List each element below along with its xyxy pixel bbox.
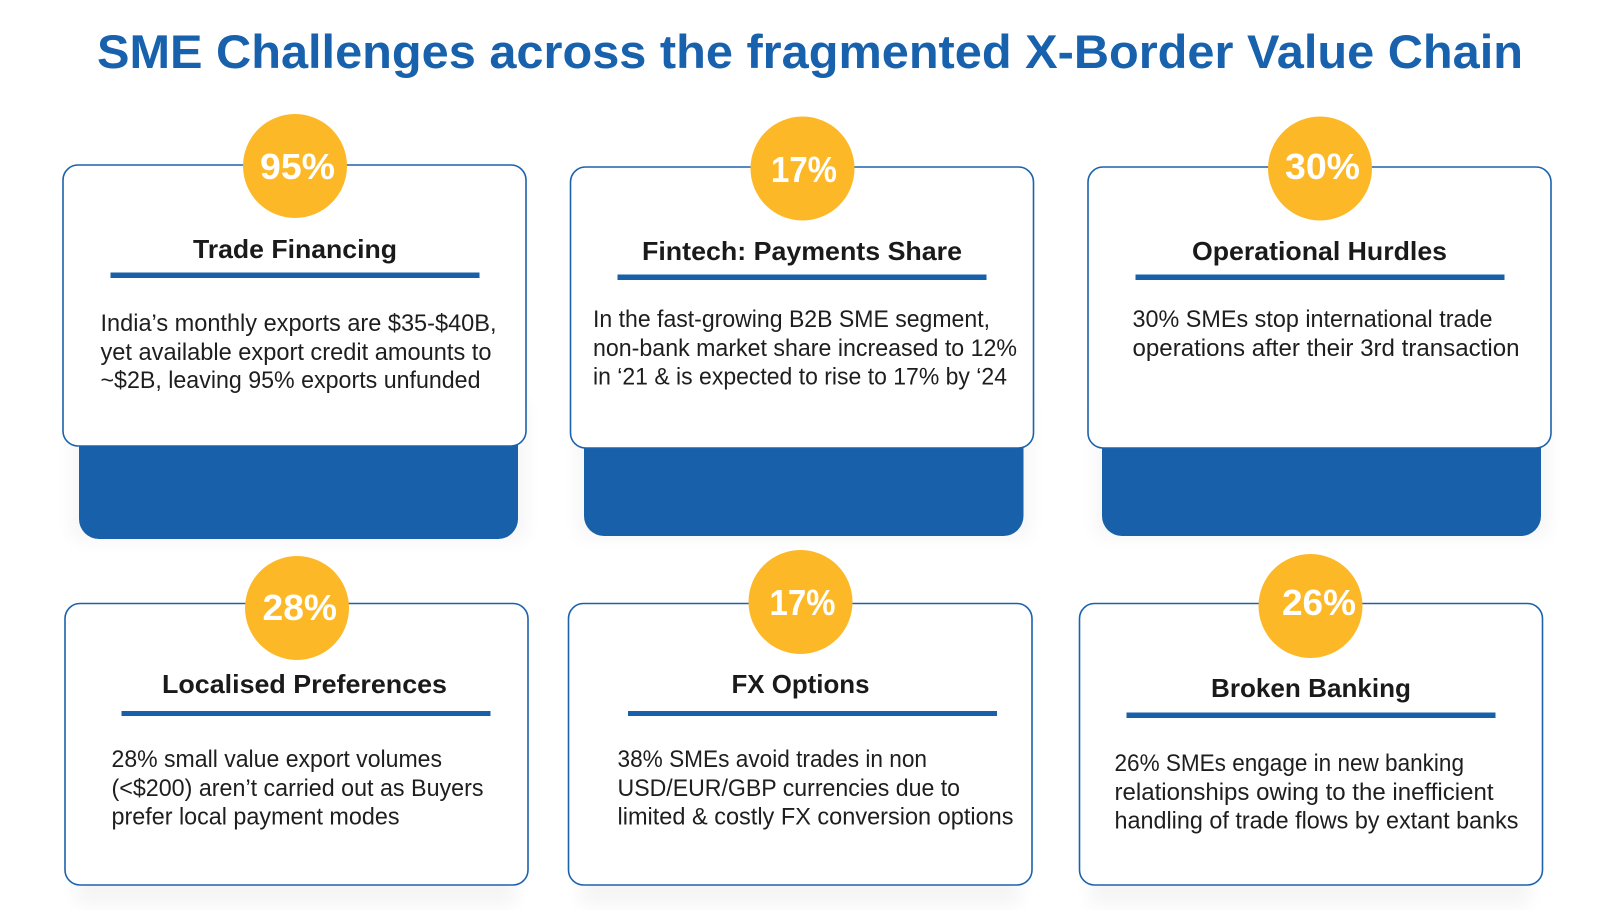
stat badge: 26%: 26% bbox=[1282, 582, 1356, 623]
body text bbox=[1132, 306, 1520, 362]
blue base bbox=[584, 430, 1024, 536]
body text bbox=[1114, 750, 1518, 834]
body text: operations after their 3rd transaction bbox=[1132, 335, 1520, 362]
heading: FX Options bbox=[732, 669, 870, 699]
panel: Fintech Payments Share bbox=[570, 116, 1034, 537]
body text: 38% SMEs avoid trades in non bbox=[618, 746, 927, 773]
stat badge: 17%: 17% bbox=[770, 582, 836, 623]
stat badge: 95% bbox=[243, 114, 347, 218]
card bbox=[1080, 604, 1542, 885]
card bbox=[570, 167, 1034, 448]
body text bbox=[618, 746, 1014, 830]
panel: Localised Preferences bbox=[65, 556, 528, 906]
heading: Trade Financing bbox=[193, 234, 397, 264]
body text: handling of trade flows by extant banks bbox=[1114, 808, 1518, 834]
body text: India’s monthly exports are $35-$40B, bbox=[100, 310, 496, 337]
stat badge: 30% bbox=[1268, 116, 1372, 220]
heading: Localised Preferences bbox=[162, 669, 447, 699]
stat badge: 17%: 17% bbox=[771, 149, 837, 190]
panel: Operational Hurdles bbox=[1088, 116, 1551, 537]
body text: yet available export credit amounts to bbox=[100, 339, 492, 366]
panel: FX Options bbox=[568, 550, 1032, 906]
body text bbox=[593, 306, 1017, 390]
stat badge: 28% bbox=[245, 556, 349, 660]
stat badge: 28%: 28% bbox=[262, 587, 337, 628]
body text: prefer local payment modes bbox=[112, 804, 400, 830]
card bbox=[1088, 167, 1551, 448]
blue base bbox=[1102, 430, 1541, 536]
body text: in ‘21 & is expected to rise to 17% by ‘24 bbox=[593, 364, 1007, 390]
body text: (<$200) aren’t carried out as Buyers bbox=[112, 775, 484, 802]
body text: USD/EUR/GBP currencies due to bbox=[618, 775, 960, 802]
body text bbox=[112, 746, 484, 830]
blue base bbox=[79, 430, 518, 539]
stat badge: 17% bbox=[750, 116, 854, 220]
stat badge: 30%: 30% bbox=[1285, 146, 1360, 187]
body text: relationships owing to the inefficient bbox=[1114, 779, 1494, 806]
body text: 28% small value export volumes bbox=[112, 746, 442, 773]
body text bbox=[100, 310, 496, 394]
card bbox=[568, 604, 1032, 885]
body text: limited & costly FX conversion options bbox=[618, 804, 1014, 830]
body text: non-bank market share increased to 12% bbox=[593, 335, 1017, 362]
body text: 30% SMEs stop international trade bbox=[1132, 306, 1492, 333]
panel: Broken Banking bbox=[1080, 554, 1542, 906]
body text: 26% SMEs engage in new banking bbox=[1114, 750, 1464, 777]
stat badge: 17% bbox=[748, 550, 852, 654]
heading: Operational Hurdles bbox=[1192, 236, 1447, 266]
body text: In the fast-growing B2B SME segment, bbox=[593, 306, 990, 333]
card bbox=[65, 604, 528, 885]
body text: ~$2B, leaving 95% exports unfunded bbox=[100, 367, 480, 394]
card bbox=[63, 165, 526, 446]
heading: Fintech: Payments Share bbox=[642, 236, 962, 266]
panel: Trade Financing bbox=[63, 114, 526, 540]
stat badge: 26% bbox=[1258, 554, 1362, 658]
heading: Broken Banking bbox=[1211, 673, 1411, 703]
stat badge: 95%: 95% bbox=[260, 146, 335, 187]
title: SME Challenges across the fragmented X-Border Value Chain bbox=[97, 25, 1523, 78]
